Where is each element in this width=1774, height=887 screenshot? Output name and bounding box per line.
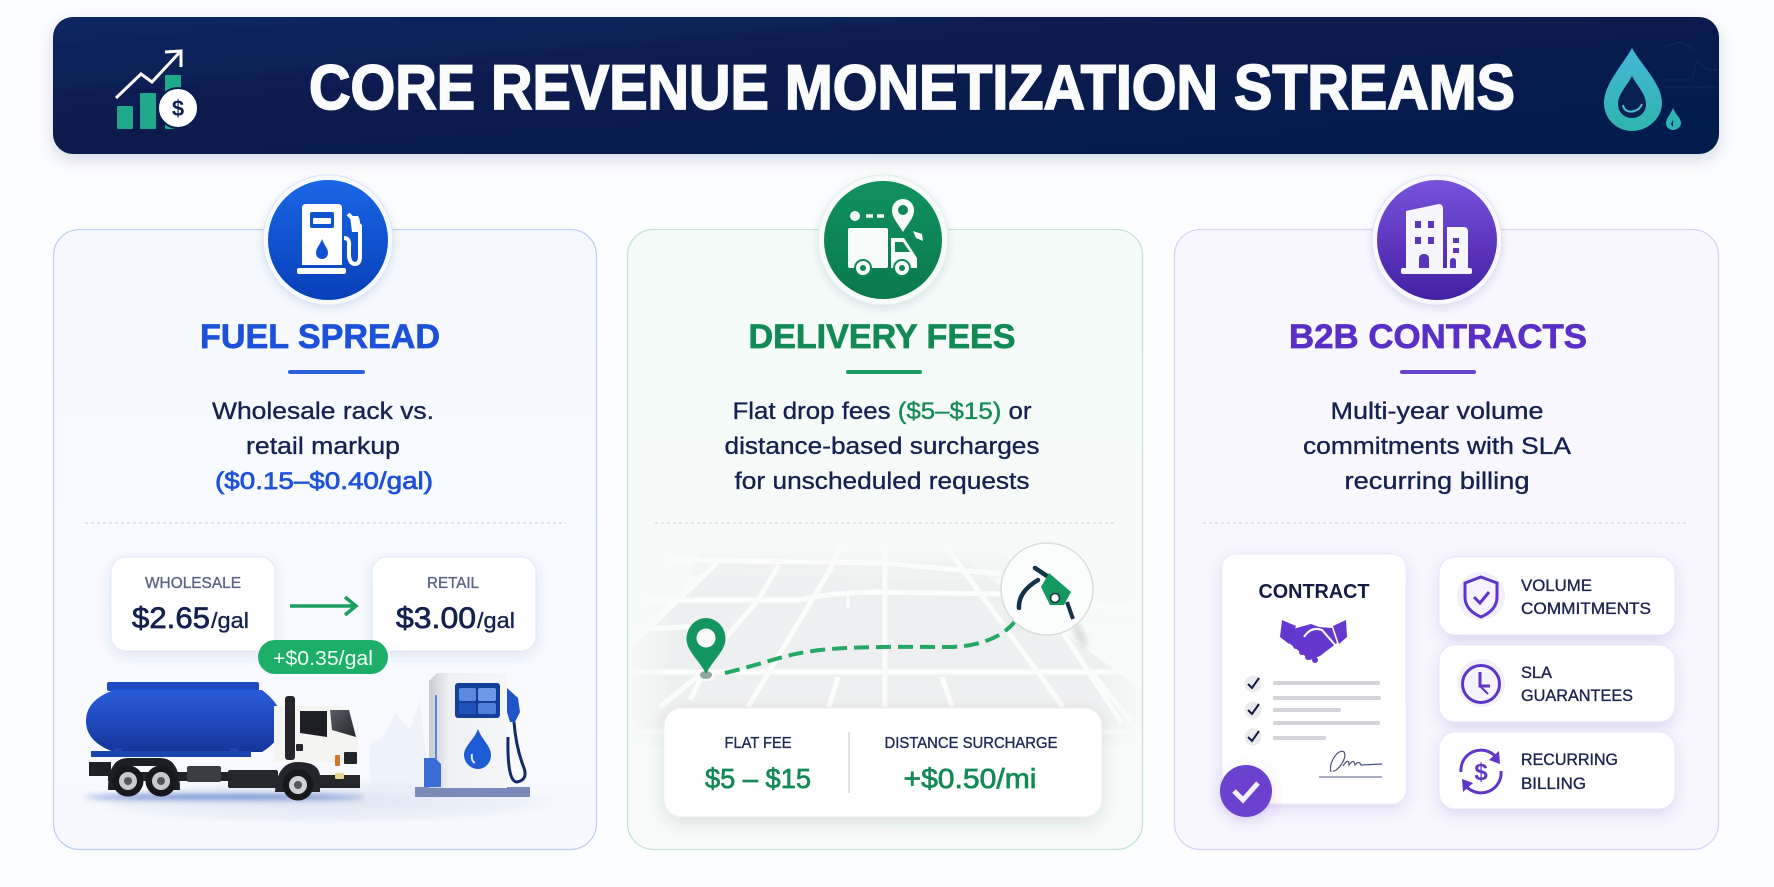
arrow: wholesale to retail [290, 597, 356, 615]
description [724, 398, 1040, 495]
card: sla guarantees [1439, 645, 1675, 722]
fee summary card: $5 – $15 [705, 763, 811, 794]
description: commitments with SLA [1303, 433, 1571, 460]
description [212, 398, 434, 495]
heading underline [846, 370, 922, 374]
wholesale price card: /gal [211, 608, 249, 633]
heading: DELIVERY FEES [748, 318, 1016, 356]
ground haze [60, 778, 584, 826]
panel: b2b contracts [1174, 175, 1718, 850]
wholesale price card: WHOLESALE [145, 575, 241, 592]
illustration: tanker truck [85, 682, 365, 800]
description: ($0.15–$0.40/gal) [215, 468, 433, 495]
fee summary card: DISTANCE SURCHARGE [884, 735, 1058, 752]
description: retail markup [246, 433, 400, 460]
card: recurring billing: RECURRING [1521, 751, 1618, 769]
card: volume commitments: COMMITMENTS [1521, 600, 1651, 618]
title: CORE REVENUE MONETIZATION STREAMS [309, 53, 1515, 123]
map illustration [658, 564, 1113, 726]
icon: location pin [686, 618, 726, 681]
margin badge: +$0.35/gal [273, 648, 373, 670]
contract document: CONTRACT [1258, 581, 1370, 603]
icon: office buildings badge [1372, 175, 1502, 305]
retail price card [372, 557, 536, 651]
description: recurring billing [1344, 468, 1530, 495]
card: volume commitments: VOLUME [1521, 577, 1592, 595]
retail price card: $3.00 [396, 602, 476, 635]
description: Wholesale rack vs. [212, 398, 434, 425]
fee summary card: FLAT FEE [724, 735, 792, 752]
wholesale price card: $2.65 [132, 602, 210, 635]
panel: fuel spread [54, 175, 596, 850]
route dashed line [725, 615, 1019, 673]
card: volume commitments [1439, 557, 1675, 635]
fee summary card [664, 708, 1102, 817]
card: sla guarantees: GUARANTEES [1521, 687, 1633, 705]
fee summary card: +$0.50/mi [904, 763, 1036, 794]
retail price card: RETAIL [427, 575, 479, 592]
contract checklist [1244, 676, 1381, 746]
card: recurring billing: $ [1474, 759, 1488, 786]
description: distance-based surcharges [724, 433, 1040, 460]
margin badge [258, 640, 388, 674]
description [1303, 398, 1571, 495]
icon: rising bar chart with dollar coin [116, 51, 198, 129]
wholesale price card [111, 557, 275, 651]
icon: fuel pump badge [263, 175, 393, 305]
signature [1319, 751, 1382, 777]
heading: B2B CONTRACTS [1289, 318, 1587, 356]
panel: delivery fees [628, 175, 1142, 850]
card: recurring billing [1439, 732, 1675, 809]
icon: teal droplets [1604, 48, 1681, 131]
description: Multi-year volume [1330, 398, 1544, 425]
illustration: fuel dispenser [415, 673, 530, 797]
heading: FUEL SPREAD [200, 318, 440, 356]
card: sla guarantees: SLA [1521, 664, 1552, 682]
icon: delivery truck badge [818, 175, 948, 305]
card: recurring billing: BILLING [1521, 775, 1586, 793]
heading underline [288, 370, 365, 374]
contract document [1220, 554, 1406, 817]
description: for unscheduled requests [734, 468, 1030, 495]
icon: approved check badge [1220, 765, 1272, 817]
icon: fuel nozzle circle [1001, 543, 1093, 650]
heading underline [1400, 370, 1476, 374]
icon: handshake [1280, 620, 1347, 663]
decorative network lines [1664, 42, 1718, 87]
retail price card: /gal [477, 608, 515, 633]
header banner [53, 17, 1719, 154]
icon: rising bar chart with dollar coin: $ [172, 96, 184, 121]
description: Flat drop fees ($5–$15) or [732, 398, 1031, 425]
